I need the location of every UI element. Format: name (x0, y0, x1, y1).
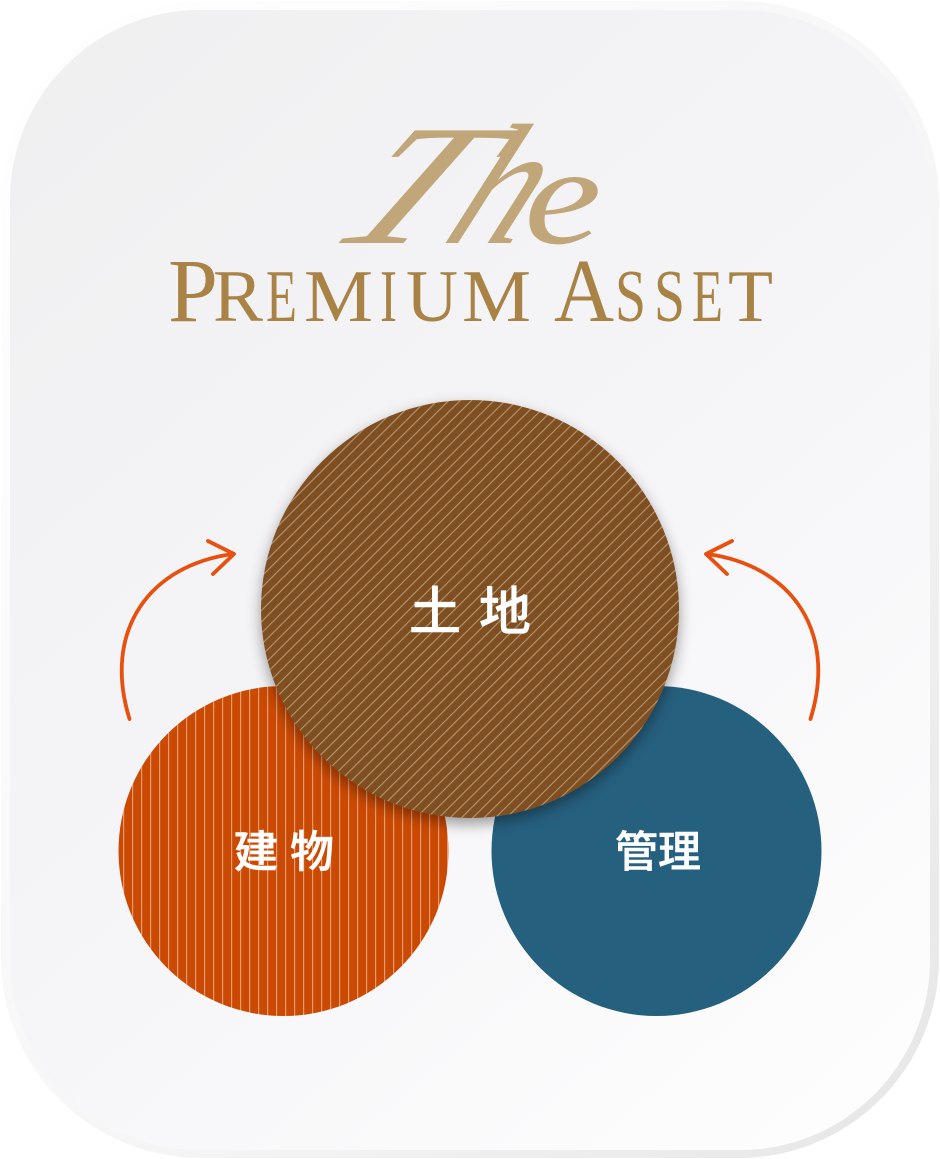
title: Premium Asset: E (266, 256, 297, 338)
label: land: 土地 (409, 584, 531, 642)
circle: land (261, 400, 679, 818)
title: Premium Asset: M (304, 256, 373, 338)
label: building: 建物 (234, 828, 334, 877)
title: The: e (524, 119, 602, 274)
title: Premium Asset: U (406, 256, 458, 338)
title: The: T (295, 90, 555, 281)
circle: building (118, 686, 448, 1016)
title: The: h (422, 89, 591, 281)
arrow: building to land (122, 541, 234, 719)
circle: management (492, 686, 822, 1016)
title: Premium Asset: A (554, 242, 614, 341)
title: Premium Asset: E (692, 256, 723, 338)
title: Premium Asset: T (728, 256, 773, 338)
title: Premium Asset: P (168, 242, 218, 341)
arrow: management to land (706, 541, 818, 719)
title: Premium Asset (168, 242, 773, 341)
title: Premium Asset: I (380, 256, 397, 338)
title: Premium Asset: S (654, 256, 685, 338)
title: Premium Asset: M (462, 256, 531, 338)
label: management: 管理 (615, 829, 701, 877)
title: Premium Asset: R (213, 256, 264, 338)
title: Premium Asset: S (615, 256, 646, 338)
